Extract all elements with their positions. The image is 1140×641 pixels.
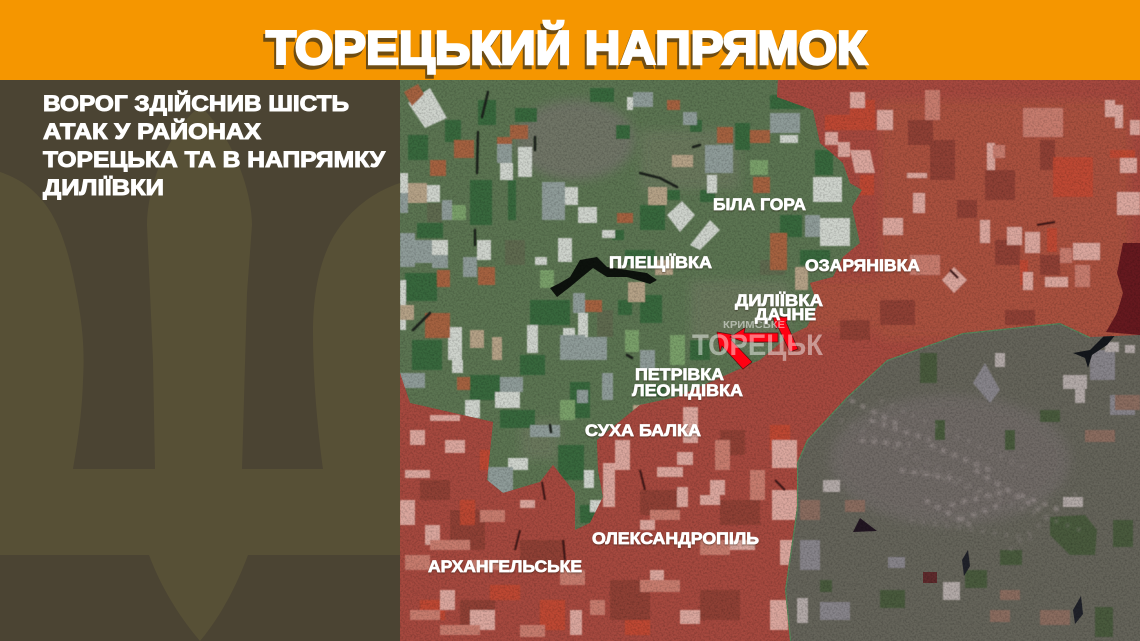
city speckle [840,400,1080,550]
arrow: attack toward Дачне [773,317,798,352]
label: Леонідівка: ЛЕОНІДІВКА [632,381,743,400]
title: ТОРЕЦЬКИЙ НАПРЯМОК [264,25,865,78]
label: Петрівка: ПЕТРІВКА [635,365,724,384]
body text block: ВОРОГ ЗДІЙСНИВ ШІСТЬ [43,91,349,116]
body text block: ДИЛІЇВКИ [43,175,164,200]
label: Кримське: КРИМСЬКЕ [723,319,785,331]
map zone: grey urban area [780,320,1140,641]
body text block: ТОРЕЦЬКА ТА В НАПРЯМКУ [43,147,385,172]
label: Біла Гора: БІЛА ГОРА [713,195,806,214]
map feature: lake [550,257,657,297]
icon: trident watermark [0,106,400,641]
label: Озарянівка: ОЗАРЯНІВКА [805,256,920,275]
panel: left sidebar [0,80,400,641]
map feature: red-tinted reservoir [1106,243,1140,335]
map texture [400,80,1140,641]
map zone: green controlled territory [400,80,870,540]
label: Плещіївка: ПЛЕЩІЇВКА [609,253,712,272]
body text block [43,91,385,200]
label: Архангельське: АРХАНГЕЛЬСЬКЕ [428,557,582,576]
header band [0,0,1140,80]
label: Дилiївка: ДИЛІЇВКА [735,291,823,310]
title: ТОРЕЦЬКИЙ НАПРЯМОК [266,21,867,74]
label: Суха Балка: СУХА БАЛКА [585,421,701,440]
label: Дачне: ДАЧНЕ [755,305,816,324]
arrow: attack from south-east toward north-west [717,332,752,369]
map zone: occupied territory (red) [400,80,1140,641]
body text block: АТАК У РАЙОНАХ [43,119,261,144]
panel: satellite map [400,80,1140,641]
arrow: attack toward Кримське [730,328,778,342]
label: Олександропіль: ОЛЕКСАНДРОПІЛЬ [592,529,759,548]
label: Торецьк: ТОРЕЦЬК [692,329,824,362]
